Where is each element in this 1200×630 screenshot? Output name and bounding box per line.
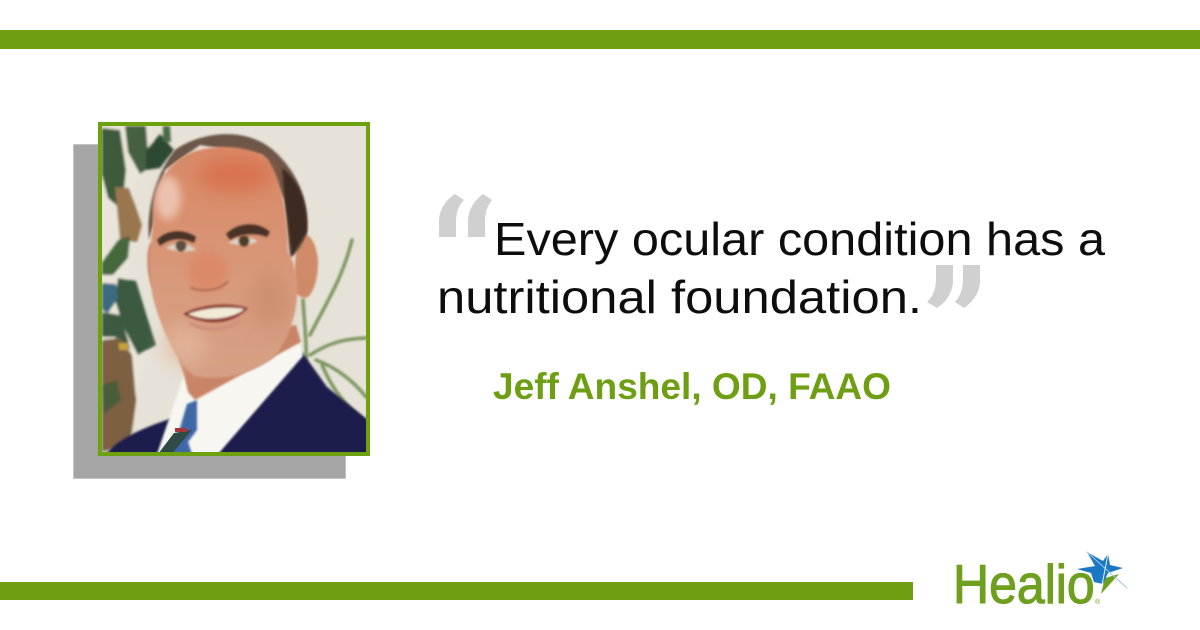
suit bbox=[106, 352, 368, 454]
icon: green star petal bbox=[1101, 574, 1119, 594]
bottom green bar bbox=[0, 582, 913, 600]
attribution: Jeff Anshel, OD, FAAO bbox=[493, 366, 891, 407]
top green bar bbox=[0, 30, 1200, 49]
icon: blue star bbox=[1077, 552, 1123, 584]
Healio logo: Healio bbox=[953, 554, 1095, 616]
tie bbox=[174, 399, 199, 452]
neck bbox=[172, 325, 301, 400]
plant on the right bbox=[303, 240, 366, 422]
gray photo shadow panel bbox=[74, 144, 346, 478]
hair bbox=[148, 134, 307, 258]
quote text bbox=[437, 213, 1105, 323]
lower face tones bbox=[163, 323, 207, 367]
ears bbox=[146, 242, 153, 290]
forehead tones bbox=[155, 176, 181, 220]
mouth bbox=[183, 305, 248, 329]
Healio logo: ® bbox=[1095, 598, 1101, 606]
face bbox=[150, 147, 297, 378]
right quotation mark icon bbox=[927, 265, 980, 308]
portrait photo of Jeff Anshel bbox=[98, 122, 370, 456]
shirt collar bbox=[157, 342, 303, 454]
icon: star highlight rays bbox=[1087, 552, 1127, 590]
eyes bbox=[166, 236, 258, 252]
quote text: nutritional foundation. bbox=[437, 271, 922, 323]
nose bbox=[188, 252, 228, 292]
left quotation mark icon bbox=[439, 194, 492, 237]
quote text: Every ocular condition has a bbox=[494, 213, 1105, 265]
plants on the left bbox=[102, 126, 174, 452]
eyebrows bbox=[157, 231, 196, 246]
